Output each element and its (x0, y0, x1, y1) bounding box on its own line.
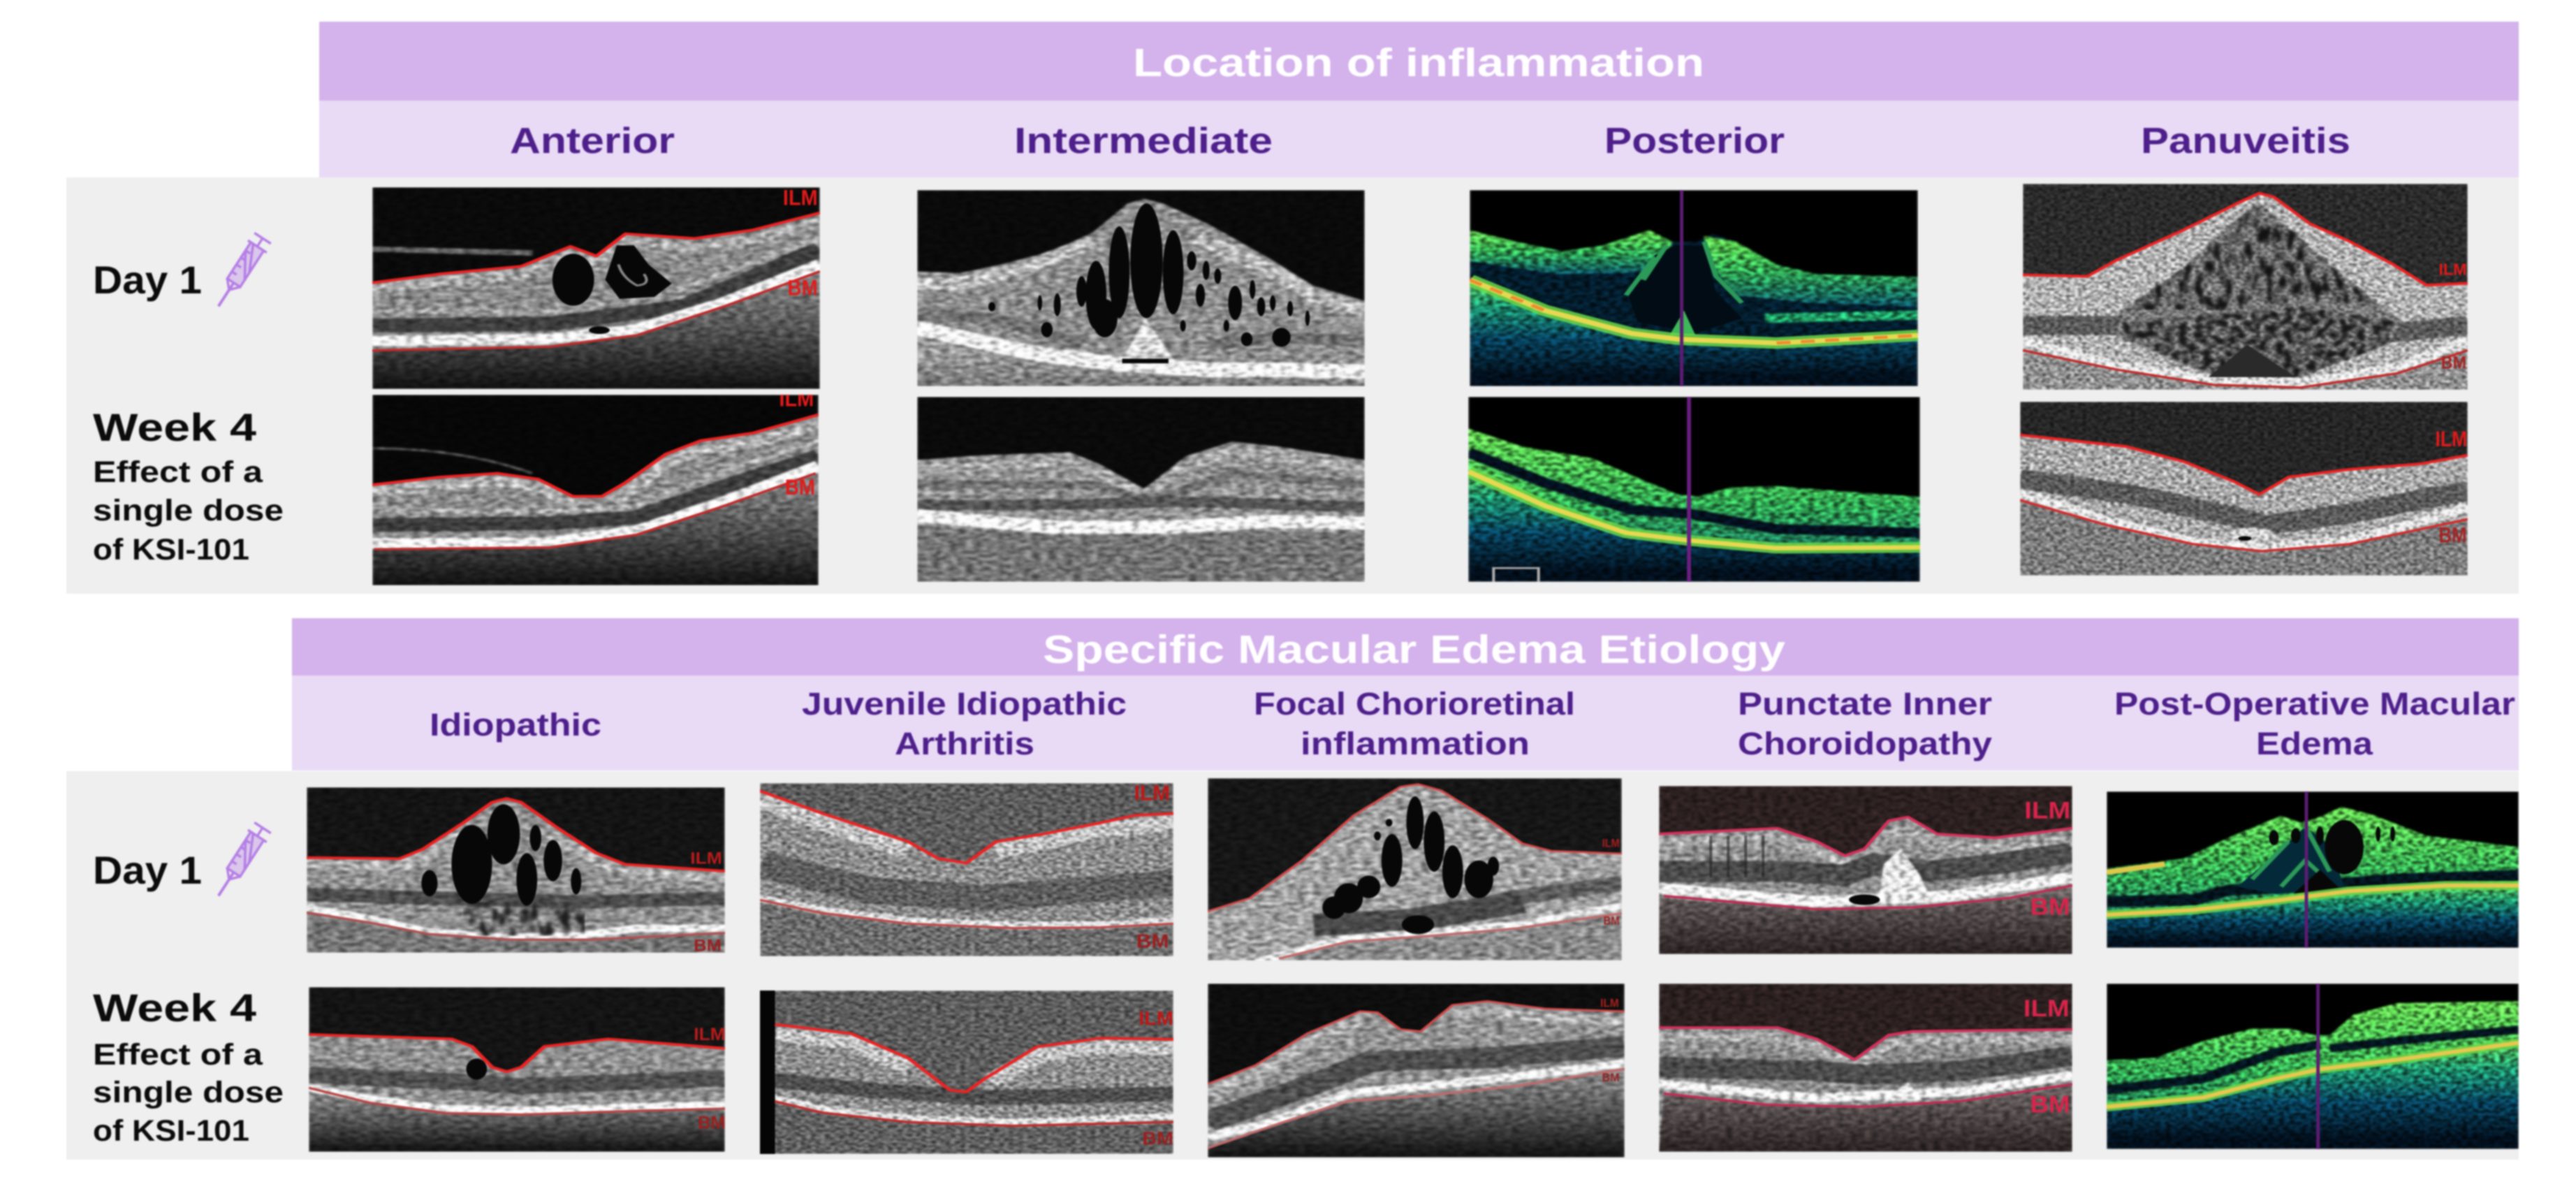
column headers: etiology: Idiopathic (430, 707, 601, 743)
row label: Week 4 effect of a single dose (93, 405, 284, 567)
column headers: etiology: Focal Chorioretinal (1254, 686, 1575, 722)
icon: syringe (209, 232, 272, 312)
column headers: etiology: Edema (2256, 726, 2373, 761)
row label: Week 4 effect of a single dose: of KSI-101 (93, 533, 249, 567)
heading bar: Location of inflammation (319, 22, 2519, 101)
column headers: location: Intermediate (1014, 121, 1273, 161)
column headers: etiology: Punctate Inner (1738, 686, 1992, 722)
OCT scan: Intermediate Week 4 (916, 395, 1366, 583)
column headers: location: Posterior (1604, 121, 1785, 161)
OCT scan: Post-Operative Macular Edema Week 4 (2105, 982, 2520, 1150)
row label: Day 1: Day 1 (93, 258, 202, 302)
OCT scan: Idiopathic Week 4 (307, 986, 726, 1153)
column headers: etiology: Post-Operative Macular (2114, 686, 2515, 722)
column headers: etiology: Arthritis (895, 726, 1034, 761)
OCT scan: Juvenile Idiopathic Arthritis Week 4 (759, 989, 1175, 1155)
row label: Week 4 effect of a single dose (93, 986, 284, 1148)
OCT scan: Posterior Week 4 (1467, 395, 1921, 583)
OCT scan: Panuveitis Day 1 (2021, 183, 2469, 391)
column headers: location: Anterior (510, 121, 675, 161)
icon: syringe (209, 821, 272, 902)
OCT scan: Juvenile Idiopathic Arthritis Day 1 (759, 782, 1175, 957)
OCT scan: Panuveitis Week 4 (2019, 401, 2469, 577)
column headers: etiology (292, 675, 2519, 770)
OCT scan: Anterior Day 1 (371, 185, 821, 390)
heading bar: Specific Macular Edema Etiology: Specific Macular Edema Etiology (1043, 627, 1785, 672)
OCT scan: Posterior Day 1 (1468, 189, 1919, 388)
OCT scan: Focal Chorioretinal inflammation Day 1 (1207, 777, 1623, 961)
column headers: location (319, 101, 2519, 177)
OCT scan: Anterior Week 4 (371, 386, 820, 587)
column headers: etiology: Juvenile Idiopathic (802, 686, 1127, 722)
column headers: location: Panuveitis (2141, 121, 2350, 161)
OCT scan: Post-Operative Macular Edema Day 1 (2105, 790, 2520, 949)
row label: Week 4 effect of a single dose: Effect of a (93, 1038, 263, 1072)
row label: Week 4 effect of a single dose: Week 4 (93, 986, 256, 1030)
heading bar: Specific Macular Edema Etiology (292, 618, 2519, 675)
OCT scan: Intermediate Day 1 (916, 189, 1366, 387)
row label: Week 4 effect of a single dose: of KSI-101 (93, 1114, 249, 1148)
row label: Week 4 effect of a single dose: single dose (93, 494, 284, 527)
row label: Week 4 effect of a single dose: Week 4 (93, 405, 256, 449)
row label: Week 4 effect of a single dose: single dose (93, 1076, 284, 1109)
heading bar: Location of inflammation: Location of inflammation (1133, 41, 1704, 85)
column headers: etiology: Choroidopathy (1738, 726, 1992, 761)
column headers: etiology: inflammation (1301, 726, 1530, 761)
row label: Day 1: Day 1 (93, 848, 202, 892)
OCT scan: Punctate Inner Choroidopathy Day 1 (1657, 785, 2074, 956)
row label: Week 4 effect of a single dose: Effect of a (93, 455, 263, 489)
OCT scan: Focal Chorioretinal inflammation Week 4 (1207, 982, 1626, 1158)
panel: specific etiology row background (66, 771, 2519, 1160)
OCT scan: Punctate Inner Choroidopathy Week 4 (1657, 982, 2074, 1153)
OCT scan: Idiopathic Day 1 (305, 787, 726, 955)
panel: location of inflammation row background (66, 177, 2519, 594)
